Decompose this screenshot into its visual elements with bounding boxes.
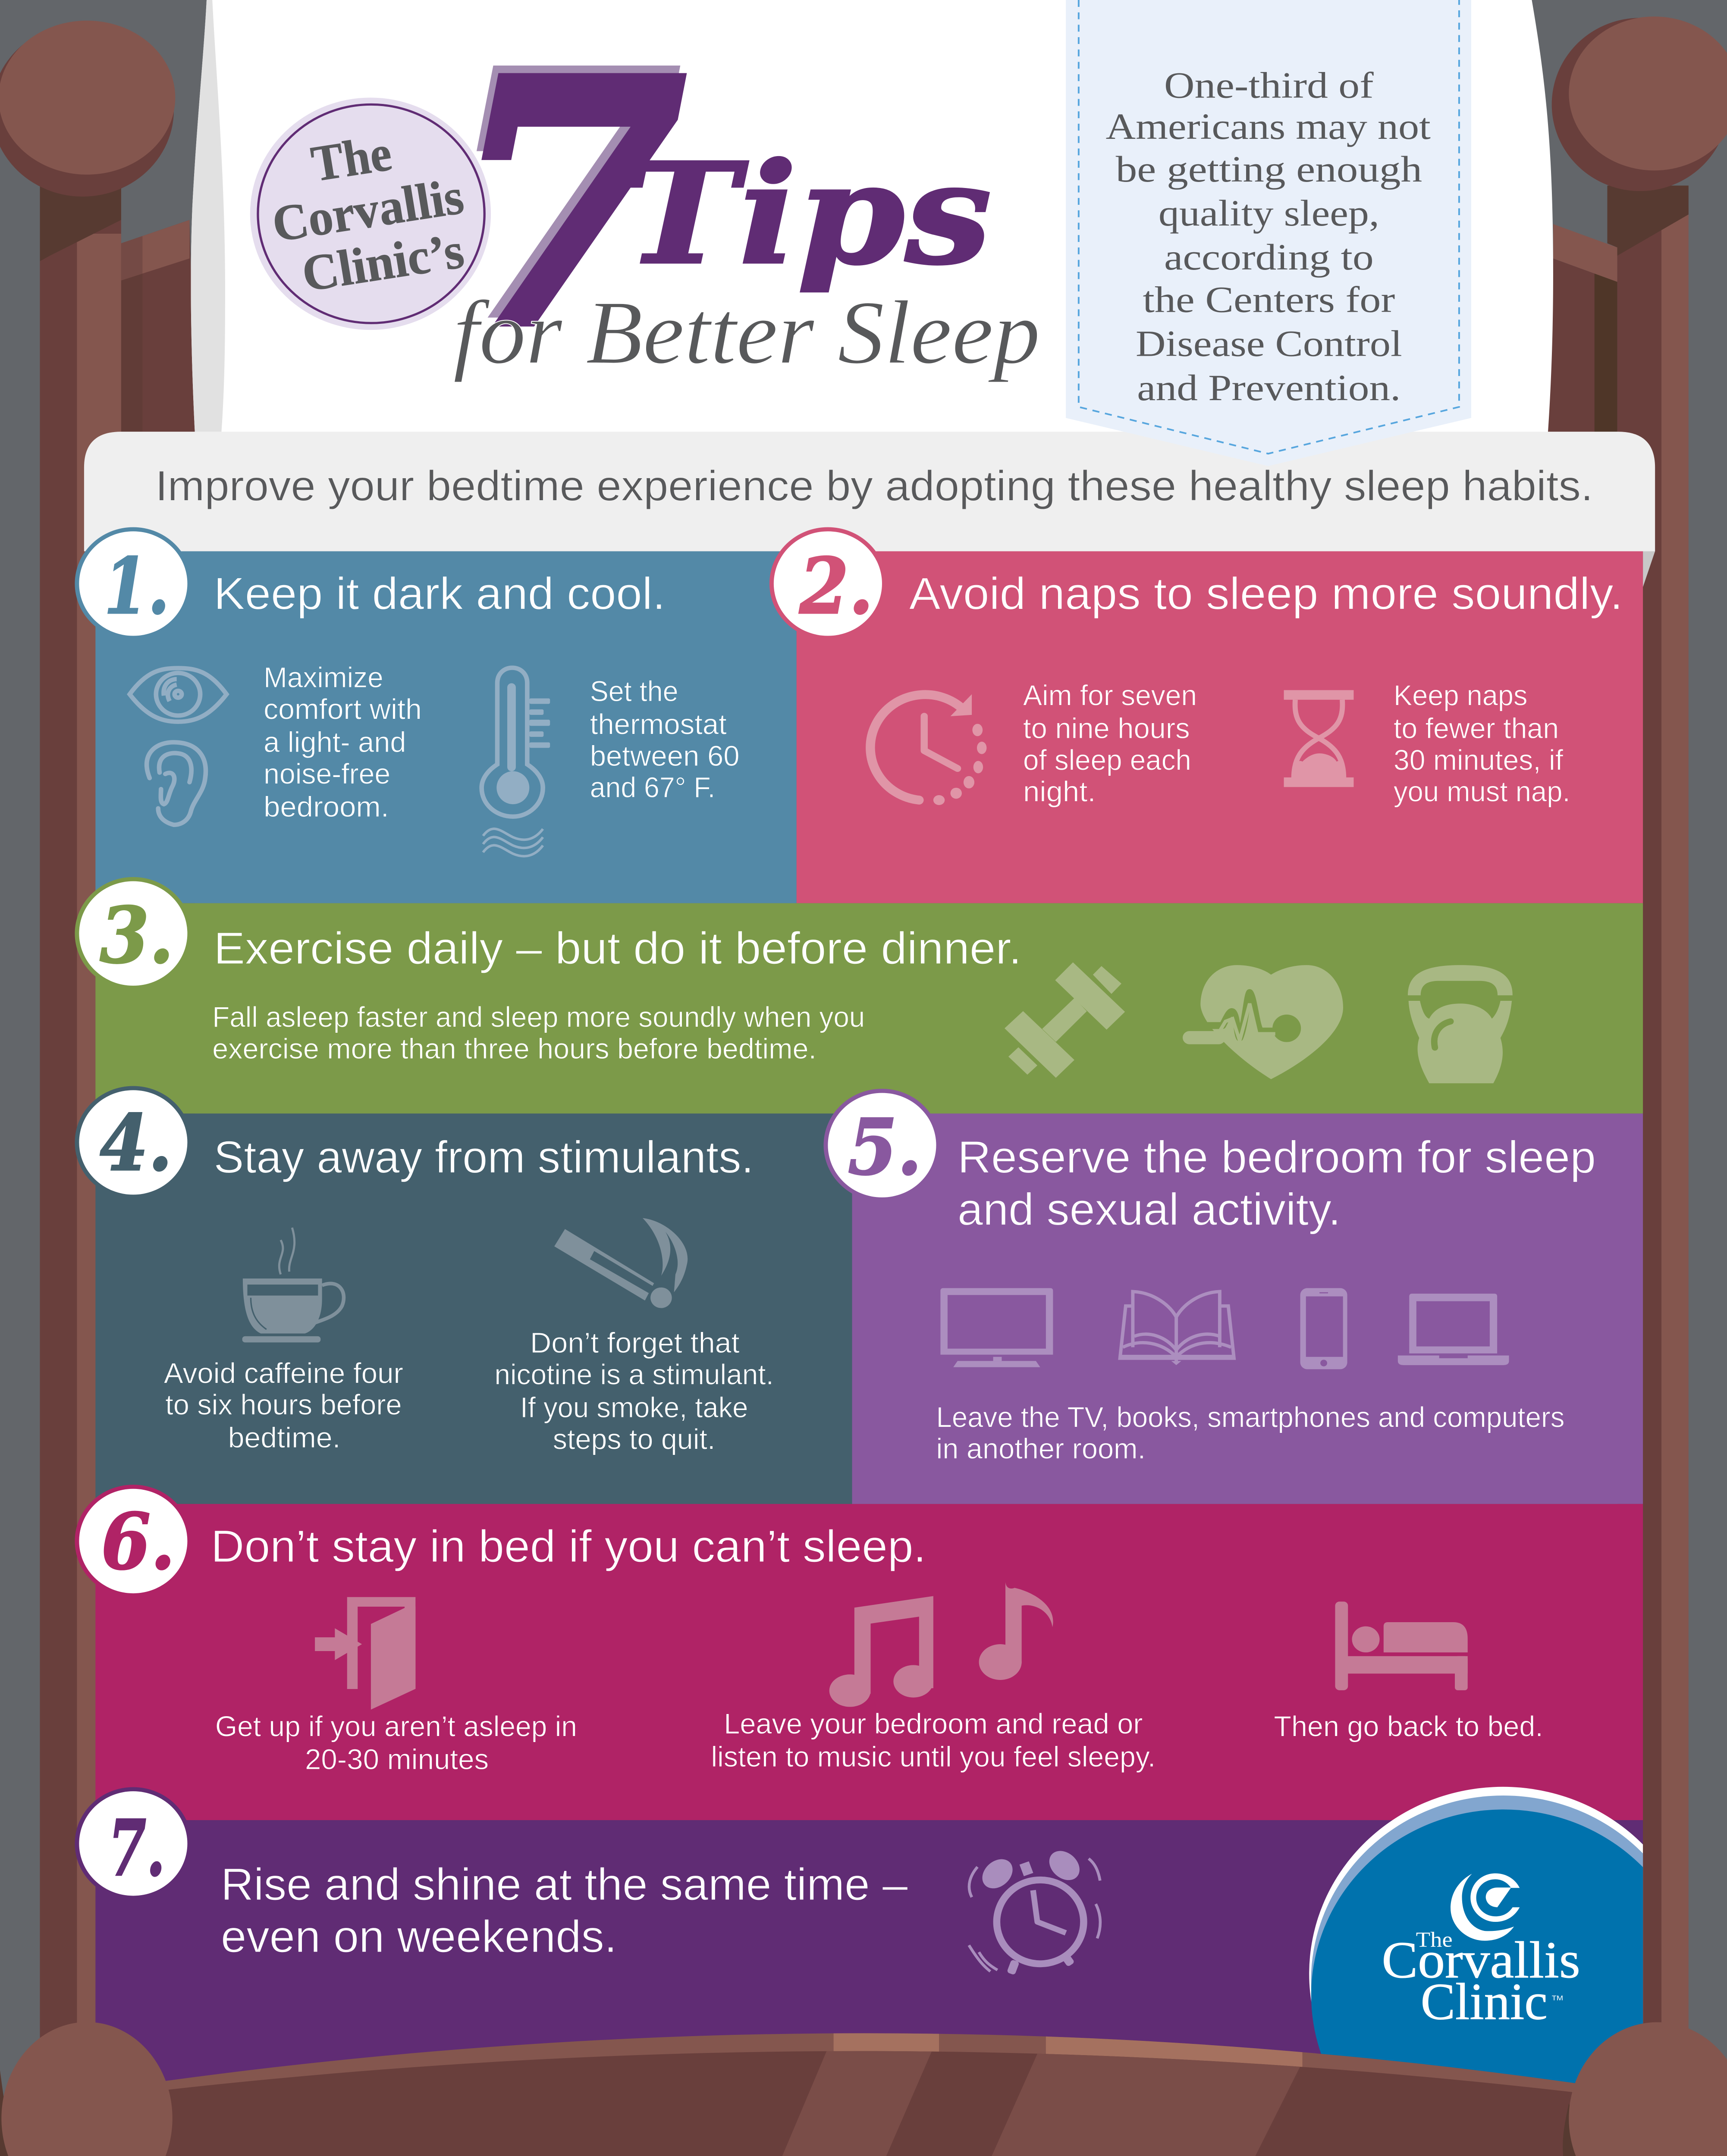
text: leave the TV: Leave the TV, books, smartphones and computers: [936, 1401, 1564, 1433]
logo: The Corvallis Clinic: [1309, 1787, 1643, 2090]
heading 7: [221, 1859, 908, 1962]
banner: CDC statistic: Americans may not: [1106, 106, 1431, 147]
text: get up: 20-30 minutes: [305, 1743, 489, 1776]
logo wordmark: Corvallis: [1382, 1931, 1580, 1989]
text: nicotine: Don’t forget that: [530, 1327, 740, 1359]
heading 5: Reserve the bedroom for sleep: [958, 1131, 1596, 1182]
panel 1: keep it dark and cool: [75, 527, 797, 903]
seal: The Corvallis Clinic's: [250, 97, 491, 330]
heading 6: Don’t stay in bed if you can’t sleep.: [211, 1520, 926, 1571]
panel 5: reserve the bedroom: [823, 1089, 1643, 1504]
intro text: Improve your bedtime experience by adopting these healthy sleep habits.: [155, 462, 1593, 510]
panel 7: rise and shine: [75, 1787, 1643, 2109]
text: seven to nine hours: night.: [1023, 776, 1096, 808]
text: leave the TV: in another room.: [936, 1433, 1146, 1465]
text: seven to nine hours: of sleep each: [1023, 744, 1191, 776]
text: seven to nine hours: to nine hours: [1023, 712, 1190, 745]
text: fall asleep faster: [212, 1001, 865, 1065]
numeral 7: 7: [450, 6, 687, 403]
word Tips: Tips: [624, 132, 992, 296]
text: avoid caffeine: to six hours before: [165, 1389, 402, 1421]
text: keep naps short: Keep naps: [1394, 680, 1527, 711]
text: avoid caffeine: Avoid caffeine four: [164, 1357, 403, 1389]
text: thermostat: Set the: [590, 675, 678, 708]
seal: The Corvallis Clinic's: The: [308, 125, 396, 192]
seal: The Corvallis Clinic's: Corvallis: [268, 168, 468, 252]
heading 2: Avoid naps to sleep more soundly.: [909, 568, 1623, 619]
panel 4: stimulants: [75, 1086, 852, 1504]
text: thermostat: thermostat: [590, 708, 727, 740]
icon: cigarette: [554, 1218, 688, 1308]
text: maximize comfort: a light- and: [264, 726, 406, 758]
text: nicotine: [494, 1327, 774, 1455]
panel 2: avoid naps: [769, 527, 1643, 903]
left foot post knob: [0, 2022, 173, 2156]
text: maximize comfort: bedroom.: [264, 791, 389, 823]
badge 2: 2.: [799, 541, 873, 631]
bed footboard: [166, 2033, 1575, 2156]
heading 7: even on weekends.: [221, 1911, 617, 1962]
badge 3: [75, 877, 192, 990]
numeral 7 shadow: 7: [445, 0, 681, 395]
icon: clock with dotted arc: [870, 694, 986, 805]
text: nicotine: If you smoke, take: [520, 1391, 748, 1424]
icon: kettlebell: [1408, 965, 1513, 1083]
badge 6: [75, 1485, 192, 1598]
text: thermostat: [590, 675, 740, 804]
text: nicotine: steps to quit.: [553, 1423, 715, 1455]
badge 1: [75, 527, 192, 640]
icon: laptop: [1398, 1294, 1509, 1365]
panel 3: exercise daily: [75, 877, 1643, 1113]
logo wordmark: The: [1416, 1927, 1453, 1951]
text: leave your bedroom: Leave your bedroom and read or: [724, 1708, 1143, 1740]
text: avoid caffeine: [164, 1357, 403, 1454]
icon: ear: [147, 742, 206, 825]
text: seven to nine hours: Aim for seven: [1023, 680, 1197, 711]
badge 1: 1.: [104, 541, 170, 631]
banner: CDC statistic: be getting enough: [1116, 148, 1422, 189]
text: maximize comfort: comfort with: [264, 693, 422, 725]
icon: door with arrow: [315, 1597, 415, 1710]
heading 3: Exercise daily – but do it before dinner.: [214, 923, 1022, 973]
left bedpost: [0, 21, 195, 2055]
banner: CDC statistic: quality sleep,: [1159, 192, 1379, 234]
text: maximize comfort: Maximize: [264, 661, 383, 694]
right bedpost: [1548, 16, 1727, 2062]
badge 3: 3.: [100, 890, 174, 981]
text: keep naps short: [1394, 680, 1570, 808]
badge 7: [75, 1787, 192, 1900]
text: fall asleep faster: exercise more than three hours before bedtime.: [212, 1033, 816, 1065]
text: maximize comfort: noise-free: [264, 758, 390, 790]
heading 4: Stay away from stimulants.: [214, 1131, 754, 1182]
badge 5: [823, 1089, 940, 1201]
banner: CDC statistic: according to: [1164, 236, 1374, 278]
pillow / white header sheet: [191, 0, 1553, 440]
banner: CDC statistic: Disease Control: [1136, 323, 1402, 364]
icon: eye: [130, 668, 226, 722]
seal: The Corvallis Clinic's: Clinic’s: [298, 222, 468, 302]
badge 7: 7.: [108, 1803, 165, 1893]
badge 4: 4.: [100, 1097, 173, 1188]
icon: hourglass: [1284, 690, 1353, 787]
icon: open book: [1119, 1291, 1234, 1365]
badge 5: 5.: [848, 1102, 922, 1192]
icon: alarm clock: [969, 1845, 1100, 1975]
icon: dumbbell: [1005, 962, 1125, 1078]
banner: CDC statistic: [1066, 0, 1471, 466]
text: avoid caffeine: bedtime.: [228, 1422, 341, 1454]
logo crescent mark: [1451, 1874, 1520, 1941]
logo wordmark: Clinic: [1421, 1972, 1548, 2031]
text: then go back: Then go back to bed.: [1274, 1711, 1543, 1742]
heading 5: [958, 1131, 1596, 1235]
icon: smartphone: [1300, 1288, 1347, 1369]
banner: CDC statistic: One-third of: [1164, 65, 1374, 106]
title: [250, 0, 1040, 403]
panel 6: don't stay in bed: [75, 1485, 1643, 1820]
badge 2: [769, 527, 886, 640]
text: maximize comfort: [264, 661, 422, 823]
icon: heart with pulse: [1183, 965, 1343, 1079]
icon: thermometer: [482, 668, 550, 856]
logo wordmark: [1382, 1927, 1580, 2031]
text: seven to nine hours: [1023, 680, 1197, 808]
heading 5: and sexual activity.: [958, 1184, 1341, 1235]
icon: bed: [1335, 1601, 1468, 1690]
subtitle: for Better Sleep: for Better Sleep: [453, 282, 1040, 383]
icon: music notes: [829, 1582, 1053, 1707]
text: keep naps short: 30 minutes, if: [1394, 744, 1564, 776]
right foot post knob: [1563, 2022, 1727, 2156]
text: leave the TV: [936, 1401, 1564, 1465]
text: thermostat: and 67° F.: [590, 771, 715, 804]
intro panel: [84, 432, 1655, 587]
text: keep naps short: you must nap.: [1394, 776, 1570, 808]
banner: CDC statistic: and Prevention.: [1137, 367, 1400, 408]
text: get up: Get up if you aren’t asleep in: [215, 1711, 577, 1742]
text: fall asleep faster: Fall asleep faster and sleep more soundly when you: [212, 1001, 865, 1033]
text: leave your bedroom: [711, 1708, 1156, 1773]
text: keep naps short: to fewer than: [1394, 712, 1559, 745]
text: thermostat: between 60: [590, 740, 740, 772]
badge 6: 6.: [101, 1496, 175, 1587]
icon: coffee cup: [242, 1228, 344, 1342]
heading 7: Rise and shine at the same time –: [221, 1859, 908, 1910]
logo wordmark: TM: [1552, 1994, 1563, 2002]
icon: television: [940, 1288, 1053, 1367]
badge 4: [75, 1086, 192, 1199]
text: nicotine: nicotine is a stimulant.: [494, 1359, 774, 1391]
text: get up: [215, 1711, 577, 1776]
heading 1: Keep it dark and cool.: [214, 568, 666, 619]
text: leave your bedroom: listen to music until you feel sleepy.: [711, 1741, 1156, 1773]
banner: CDC statistic: the Centers for: [1143, 279, 1395, 320]
